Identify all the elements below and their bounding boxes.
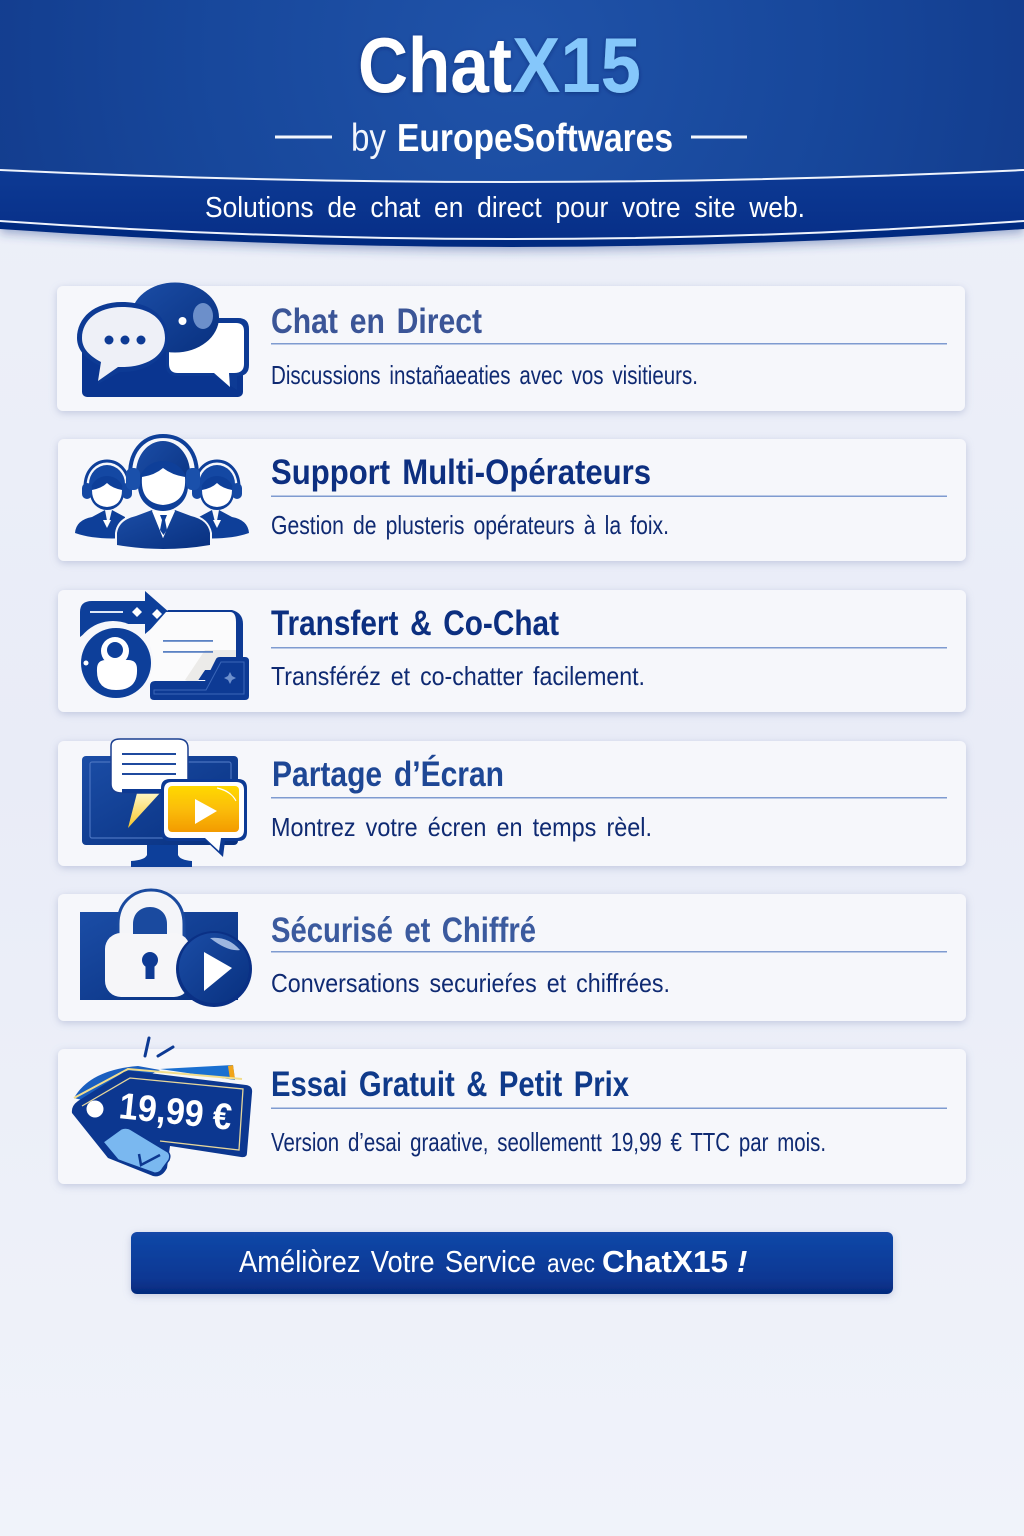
icon: screen sharing [82,739,247,867]
button label: Améliòrez Votre Service [239,1244,536,1279]
button label: avec [547,1248,595,1278]
description: Conversations securieŕes et chiffrées. [271,968,670,998]
lock circle [73,621,153,701]
header banner [0,0,1024,247]
panel: Essai Gratuit & Petit Prix [58,1038,966,1184]
heading: Support Multi-Opérateurs [271,453,651,492]
button label: ChatX15 [602,1244,728,1279]
heading: Transfert & Co-Chat [271,604,559,643]
icon: padlock and play [80,890,252,1007]
title: ChatX15: Chat [358,21,512,109]
panel: Transfert & Co-Chat [58,590,966,712]
title: ChatX15: X15 [512,21,641,109]
center operator [115,436,212,552]
monitor [82,756,238,845]
subtitle: by EuropeSoftwares: EuropeSoftwares [397,117,673,160]
icon: support team [75,436,249,552]
arrow [80,591,170,637]
description: Gestion de plusteris opérateurs à la foix. [271,510,669,540]
description: Version d’esai graative, seollementt 19,99 € TTC par mois. [271,1127,826,1157]
document [150,610,243,680]
panel: Chat en Direct [57,282,965,411]
description: Discussions instañaeaties avec vos visitieurs. [271,360,698,390]
button label: ! [737,1244,747,1279]
icon: price tag [72,1038,252,1176]
text bubble [128,793,160,828]
video bubble [161,779,247,857]
heading: Chat en Direct [271,302,482,341]
price: 19,99 € [117,1085,234,1138]
subtitle: by EuropeSoftwares [275,117,747,160]
button label [239,1244,747,1279]
subtitle: by EuropeSoftwares: by [351,117,386,160]
right operator [192,461,249,538]
left operator [75,461,132,538]
description: Transféréz et co-chatter facilement. [271,661,645,691]
icon: chat bubbles [77,282,249,397]
fold [103,1128,170,1173]
panel: Support Multi-Opérateurs [58,436,966,561]
heading: Sécurisé et Chiffré [271,911,536,950]
panel: Sécurisé et Chiffré [58,890,966,1021]
tagline: Solutions de chat en direct pour votre site web. [205,192,805,224]
description: Montrez votre écren en temps rèel. [271,812,652,842]
icon: transfer and co-chat [73,591,249,701]
panel: Partage d'Écran [58,739,966,867]
heading: Partage d’Écran [272,754,504,794]
sparks [145,1038,149,1056]
folder [150,657,249,700]
heading: Essai Gratuit & Petit Prix [271,1065,629,1104]
back cards [160,1065,235,1080]
tag body [72,1071,252,1176]
call to action button [131,1232,893,1294]
title: ChatX15 [358,21,641,109]
